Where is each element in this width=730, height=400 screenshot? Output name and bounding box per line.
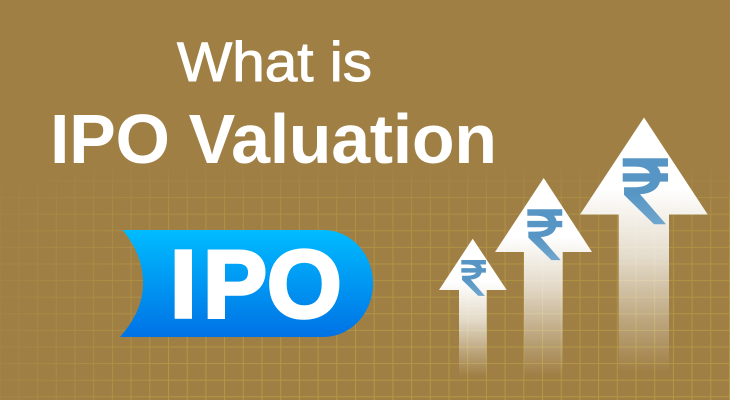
small arrow shape <box>439 239 507 376</box>
icon: medium rupee <box>527 209 562 260</box>
background grid <box>20 183 730 400</box>
title: What is: What is <box>177 30 372 93</box>
arrow: medium with rupee <box>495 178 592 376</box>
icon: small rupee <box>461 260 486 296</box>
title: IPO Valuation: IPO Valuation <box>50 100 497 178</box>
badge text: P <box>203 231 267 338</box>
arrow: small with rupee <box>439 239 507 376</box>
icon: large rupee <box>623 158 668 224</box>
IPO badge <box>120 230 373 338</box>
badge text: O <box>267 231 342 338</box>
medium arrow shape <box>495 178 592 376</box>
arrow: large with rupee <box>580 118 708 372</box>
badge text: I <box>170 231 197 338</box>
large arrow shape <box>580 118 708 372</box>
badge shape <box>120 230 373 337</box>
